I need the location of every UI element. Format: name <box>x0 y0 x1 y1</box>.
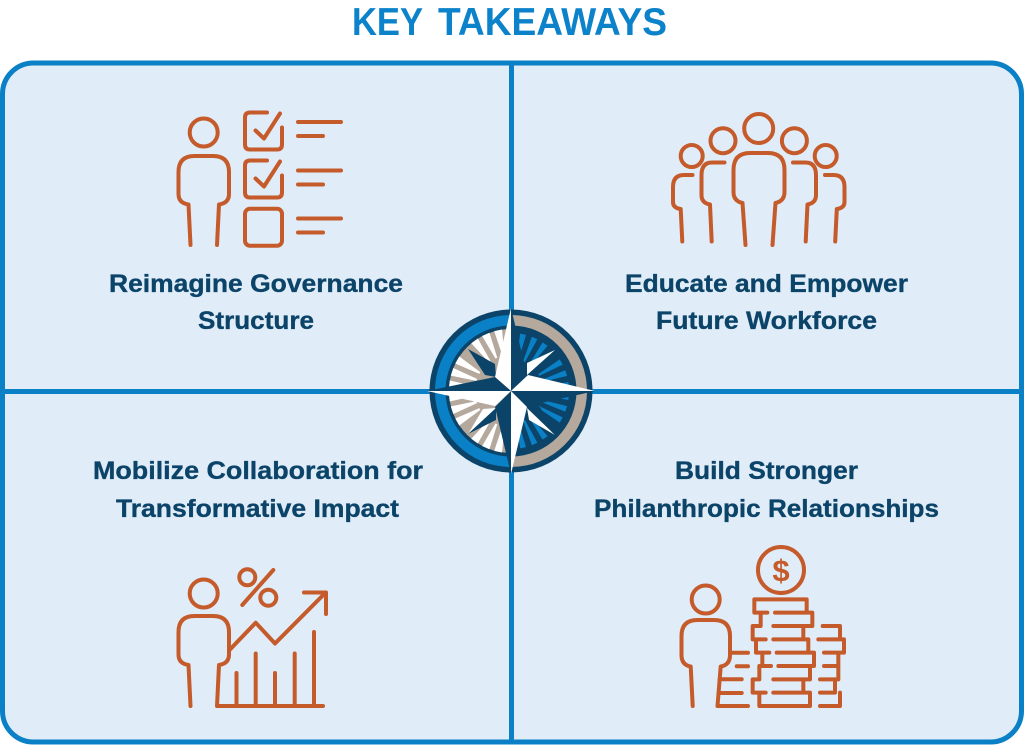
heading: educate and empower future workforce: Future Workforce <box>656 307 877 335</box>
heading: mobilize collaboration for transformative impact: Transformative Impact <box>116 495 400 523</box>
icon: person with rising chart and percent <box>178 569 326 706</box>
heading: build stronger philanthropic relationships <box>594 457 939 523</box>
icon: person with coin stacks <box>682 547 844 706</box>
icon: dollar sign: $ <box>772 553 790 588</box>
heading: reimagine governance structure <box>109 270 403 335</box>
heading: mobilize collaboration for transformative impact: Mobilize Collaboration for <box>93 457 423 485</box>
title: KEY <box>352 1 423 44</box>
heading: reimagine governance structure: Structure <box>198 307 314 335</box>
title: TAKEAWAYS <box>438 1 667 44</box>
heading: build stronger philanthropic relationships: Philanthropic Relationships <box>594 495 939 523</box>
heading: educate and empower future workforce: Educate and Empower <box>625 270 908 298</box>
heading: build stronger philanthropic relationships: Build Stronger <box>675 457 858 485</box>
heading: mobilize collaboration for transformative impact <box>93 457 423 523</box>
heading: reimagine governance structure: Reimagine Governance <box>109 270 403 298</box>
heading: educate and empower future workforce <box>625 270 908 335</box>
icon: person with checklist <box>178 112 341 246</box>
icon: compass rose <box>427 308 595 474</box>
icon: group of five people <box>673 114 844 245</box>
